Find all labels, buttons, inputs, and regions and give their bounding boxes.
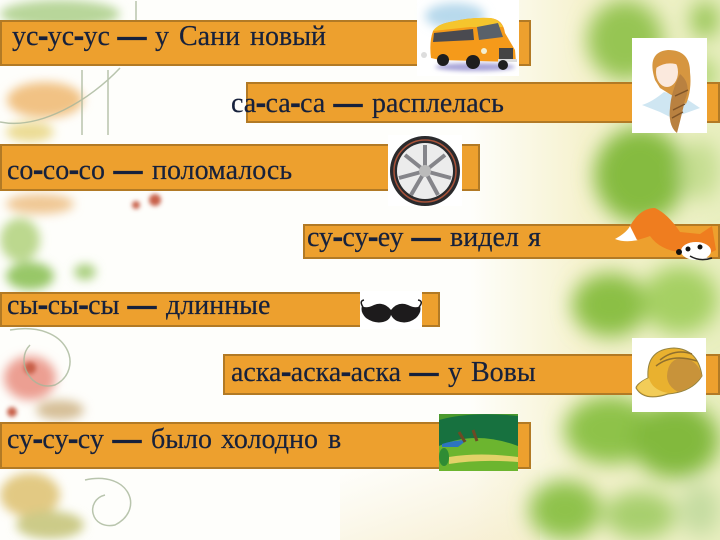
text: line 7: в (328, 424, 341, 455)
text: line 2: — (333, 88, 363, 119)
icon: forest landscape (439, 414, 518, 471)
icon: yellow hard hat (632, 338, 706, 412)
panel: line 5 about the moustache (1, 290, 439, 326)
text: line 2: са-са-са (231, 88, 325, 119)
text: line 1: ус-ус-ус (12, 21, 110, 52)
text: line 6: у (448, 357, 462, 388)
text: line 6: Вовы (471, 357, 536, 388)
panel: line 4 about the fox (304, 222, 719, 258)
icon: fox (615, 208, 716, 260)
text: line 7: су-су-су (7, 424, 104, 455)
icon: moustache (360, 291, 422, 329)
icon: yellow bus (417, 0, 519, 76)
text: line 4: — (411, 222, 441, 253)
text: line 5: сы-сы-сы (7, 290, 119, 321)
text: line 3: поломалось (152, 155, 292, 186)
text: line 6: аска-аска-аска (231, 357, 401, 388)
text: line 5: длинные (166, 290, 270, 321)
panel: line 2 about the braid (231, 83, 719, 122)
text: line 6: — (409, 357, 439, 388)
text: line 1: у (155, 21, 169, 52)
text: line 4: видел (450, 222, 519, 253)
text: line 3: — (113, 155, 143, 186)
panel: line 1 about the bus (1, 21, 530, 65)
text: line 5: — (127, 290, 157, 321)
panel: line 3 about the wheel (1, 145, 479, 190)
text: line 3: со-со-со (7, 155, 105, 186)
text: line 1: — (117, 21, 147, 52)
text: line 7: холодно (221, 424, 318, 455)
text: line 1: новый (250, 21, 326, 52)
text: line 2: расплелась (372, 88, 504, 119)
text: line 4: я (528, 222, 541, 253)
text: line 7: — (112, 424, 142, 455)
panel: line 6 about the helmet (224, 355, 719, 394)
icon: car wheel (388, 135, 462, 206)
icon: girl with a braid (632, 38, 707, 133)
text: line 1: Сани (179, 21, 240, 52)
text: line 7: было (151, 424, 212, 455)
text: line 4: су-су-еу (307, 222, 404, 253)
panel: line 7 about the forest (1, 423, 530, 468)
